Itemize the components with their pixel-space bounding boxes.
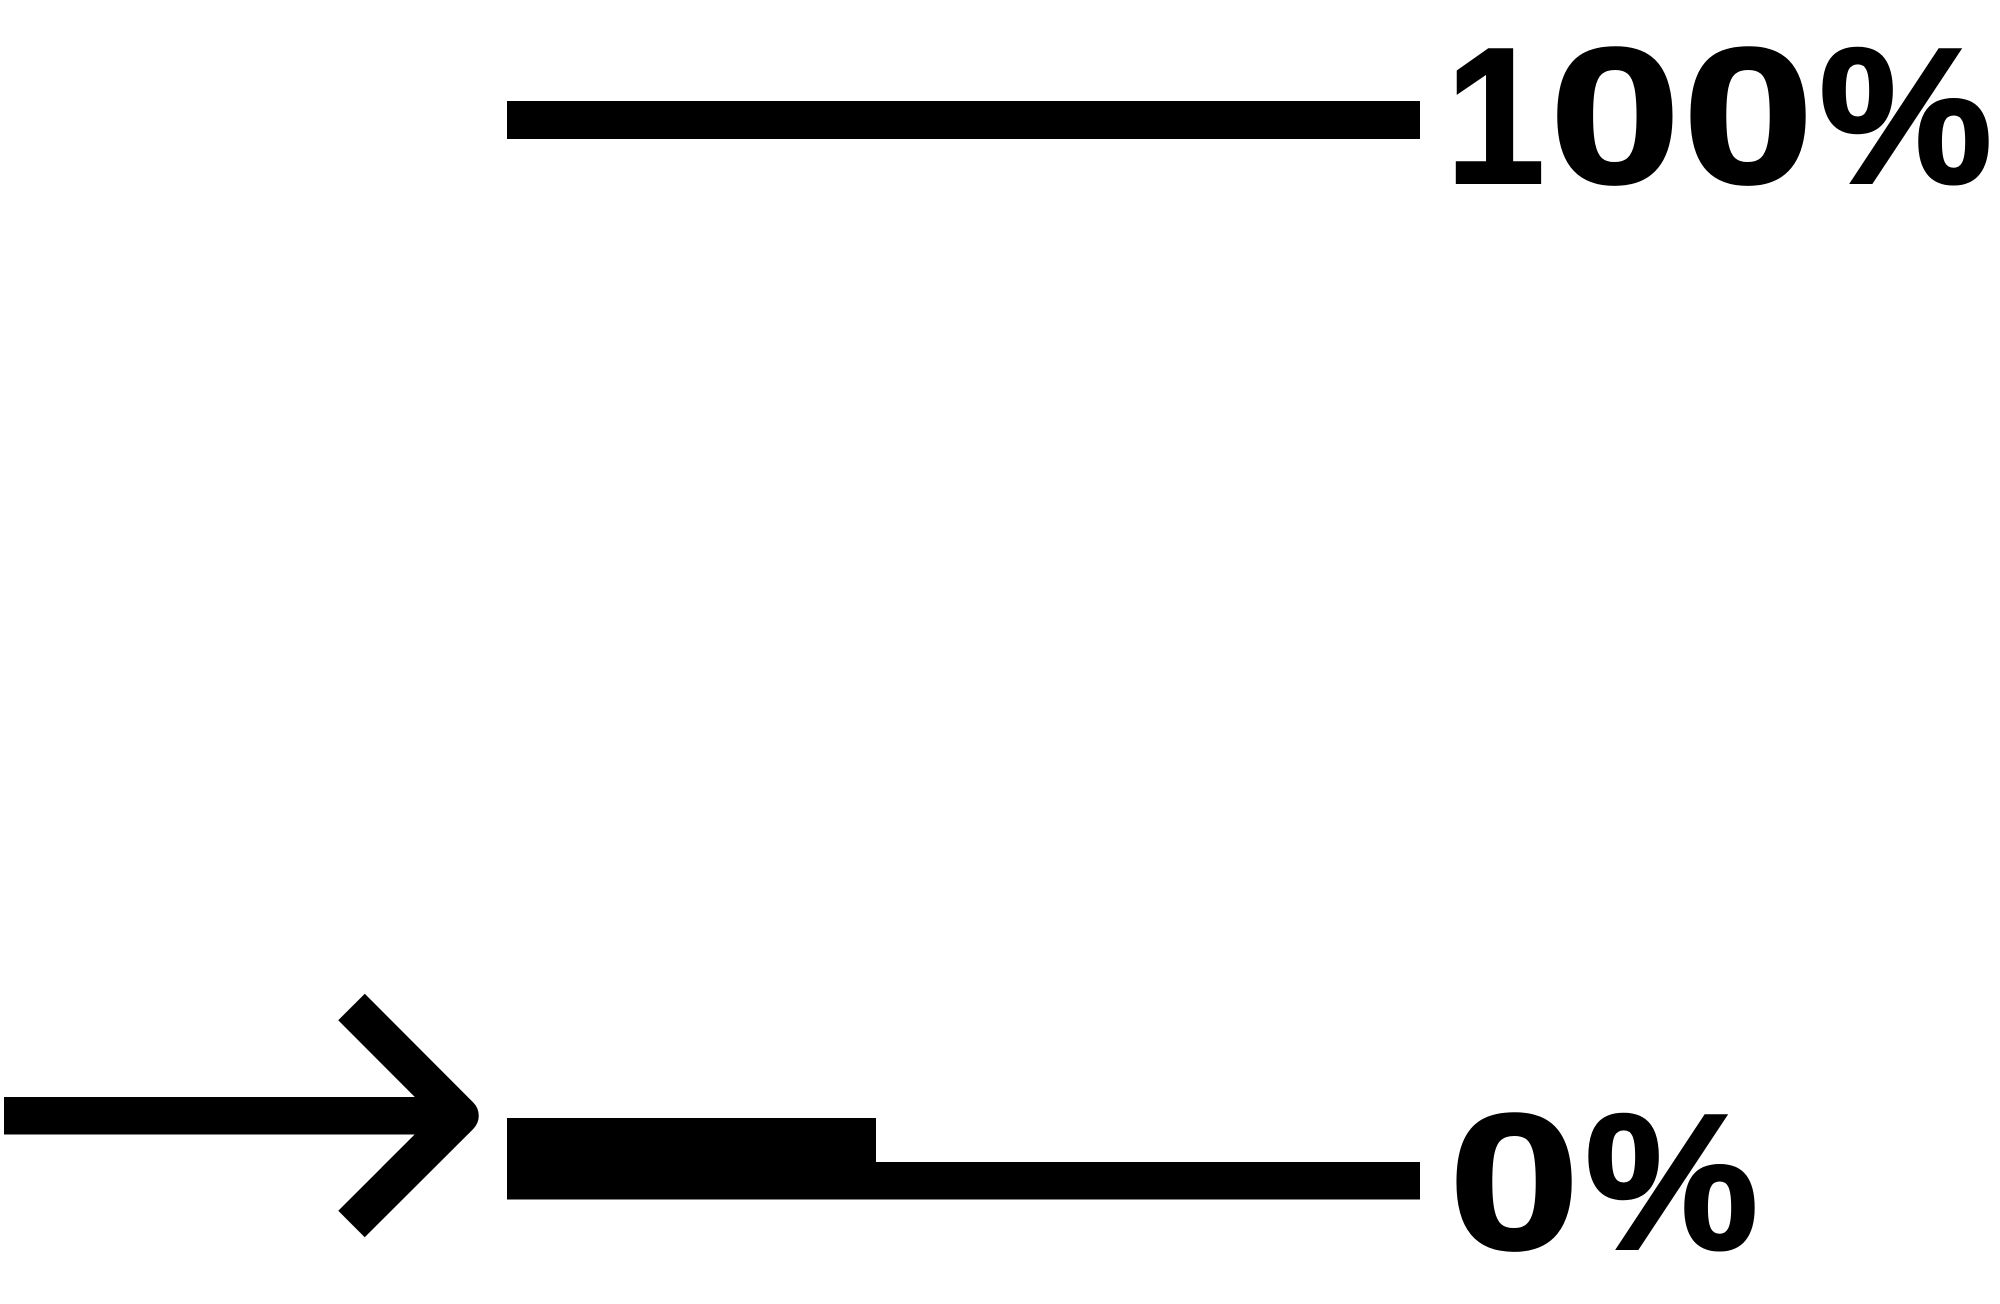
- label: 100%: 0: [1683, 8, 1814, 224]
- current level fill bar: [507, 1118, 876, 1200]
- label: 0%: [1449, 1074, 1758, 1290]
- label: 100%: 1: [1446, 8, 1545, 224]
- bottom gauge line: 0% level: [507, 1162, 1420, 1200]
- label: 0%: 0: [1449, 1074, 1580, 1290]
- top gauge line: 100% level: [507, 101, 1420, 139]
- label: 100%: [1446, 8, 1992, 224]
- icon: arrow pointing at current level: [4, 1007, 460, 1224]
- label: 100%: 0: [1550, 8, 1680, 224]
- label: 0%: %: [1585, 1074, 1758, 1290]
- label: 100%: %: [1819, 8, 1992, 224]
